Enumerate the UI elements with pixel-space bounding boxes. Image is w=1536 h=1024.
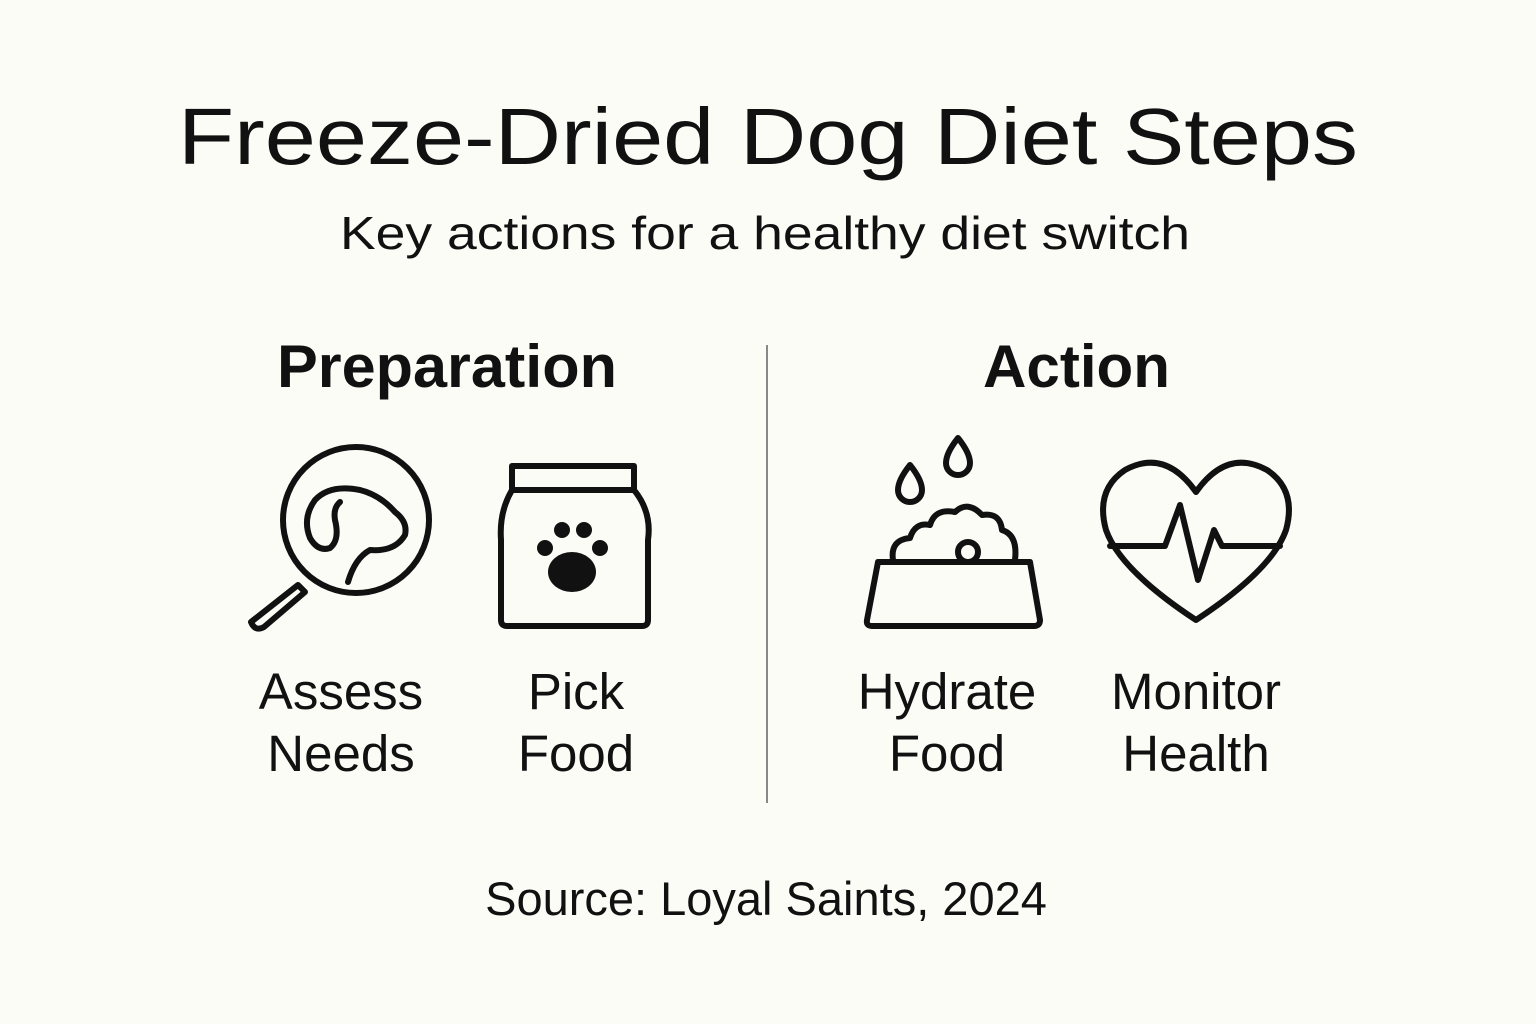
icon: magnifier with dog <box>251 447 429 629</box>
heading: Action: Action <box>983 333 1170 400</box>
icon: heart with pulse <box>1103 463 1289 620</box>
icon: bowl with water drops <box>867 438 1040 626</box>
label: Assess Needs: Assess <box>259 663 423 720</box>
label: Pick Food: Food <box>518 725 634 782</box>
label: Hydrate Food: Hydrate <box>858 663 1036 720</box>
subtitle: Key actions for a healthy diet switch <box>340 207 1190 259</box>
label: Monitor Health: Health <box>1122 725 1270 782</box>
label: Hydrate Food: Food <box>889 725 1005 782</box>
icon: food bag <box>501 466 649 626</box>
label: Monitor Health: Monitor <box>1111 663 1281 720</box>
heading: Preparation: Preparation <box>277 333 617 400</box>
label: Pick Food: Pick <box>528 663 624 720</box>
source: Source: Loyal Saints, 2024 <box>485 872 1047 925</box>
label: Assess Needs: Needs <box>267 725 415 782</box>
title: Freeze-Dried Dog Diet Steps <box>178 92 1358 181</box>
